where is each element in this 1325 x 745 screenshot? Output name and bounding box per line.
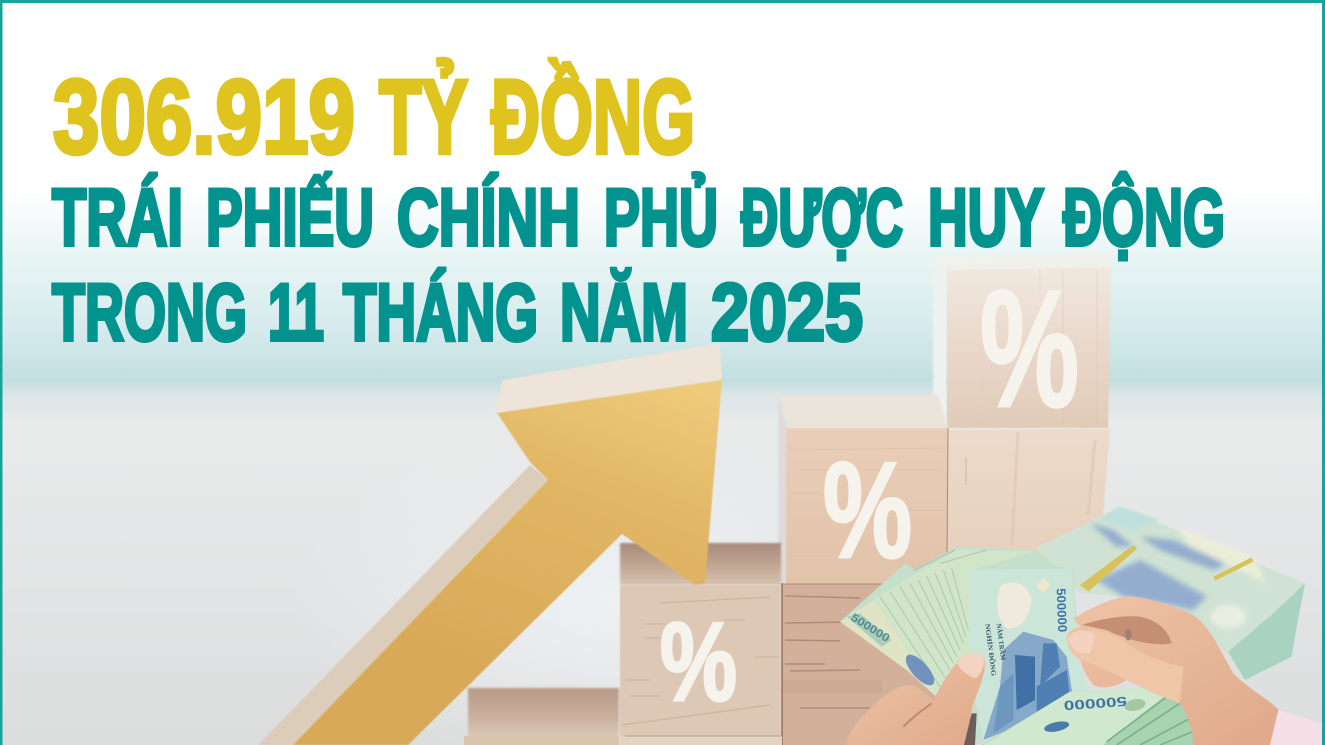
right shirt cuff <box>1270 710 1325 745</box>
block: middle right plain <box>948 429 1110 560</box>
lower banknotes <box>982 687 1198 745</box>
title block <box>52 58 1225 358</box>
wooden blocks staircase <box>464 252 1112 745</box>
title line 3: NĂM <box>560 268 688 358</box>
lower note value: 500000 <box>1063 694 1128 713</box>
rising arrow <box>258 343 722 745</box>
headline figure: ĐỒNG <box>491 58 695 176</box>
title line 2: HUY <box>928 173 1044 263</box>
block: lower right with grain <box>782 583 952 745</box>
lower note emblem <box>1043 719 1070 734</box>
title line 3: 2025 <box>711 268 863 358</box>
block: bottom step <box>464 688 782 745</box>
headline figure <box>53 58 695 176</box>
rubber bands <box>1080 545 1137 592</box>
title line 3: TRONG <box>52 268 247 358</box>
headline figure: 306.919 <box>53 59 355 176</box>
banknote star mark <box>1037 578 1051 593</box>
title line 2: PHIẾU <box>206 172 374 263</box>
background soft glow <box>290 430 950 745</box>
percent sign: low block: % <box>660 600 737 724</box>
note label 2: NGHÌN ĐỒNG <box>983 623 998 677</box>
title line 3 <box>52 268 863 358</box>
lower note mark <box>1123 697 1147 713</box>
right hand <box>1067 597 1279 745</box>
percent sign: top block: % <box>980 257 1079 442</box>
title line 2 <box>52 172 1225 263</box>
title line 2: ĐỘNG <box>1063 172 1225 263</box>
title line 2: PHỦ <box>604 172 718 263</box>
denomination text: 500000 <box>1054 588 1069 632</box>
fanned banknotes <box>840 547 1088 745</box>
block: middle with percent <box>778 395 948 584</box>
arrow body <box>293 380 722 745</box>
money and hands photo <box>840 507 1325 745</box>
title line 2: CHÍNH <box>397 172 580 263</box>
headline figure: TỶ <box>379 58 468 176</box>
banknote watermark <box>997 583 1032 628</box>
left hand <box>847 652 985 745</box>
title line 3: THÁNG <box>343 268 538 358</box>
front banknote <box>968 568 1088 743</box>
title line 2: ĐƯỢC <box>741 173 903 263</box>
percent sign: middle block: % <box>823 434 912 586</box>
money stack: back right <box>1035 507 1305 680</box>
blurred banknote prints <box>1090 523 1267 628</box>
block: top with percent <box>933 252 1112 428</box>
title line 3: 11 <box>268 268 324 358</box>
note edges <box>880 550 987 687</box>
title line 2: TRÁI <box>52 173 183 263</box>
left note value panel <box>847 613 892 647</box>
left note value text: 500000 <box>848 612 892 645</box>
arrow shaft side face <box>258 465 548 745</box>
block: low with percent <box>620 543 781 736</box>
banknote blue vignette <box>983 632 1073 740</box>
left note portrait <box>901 650 939 690</box>
note label: NĂM TRĂM <box>995 623 1007 661</box>
arrow top face <box>495 343 722 413</box>
